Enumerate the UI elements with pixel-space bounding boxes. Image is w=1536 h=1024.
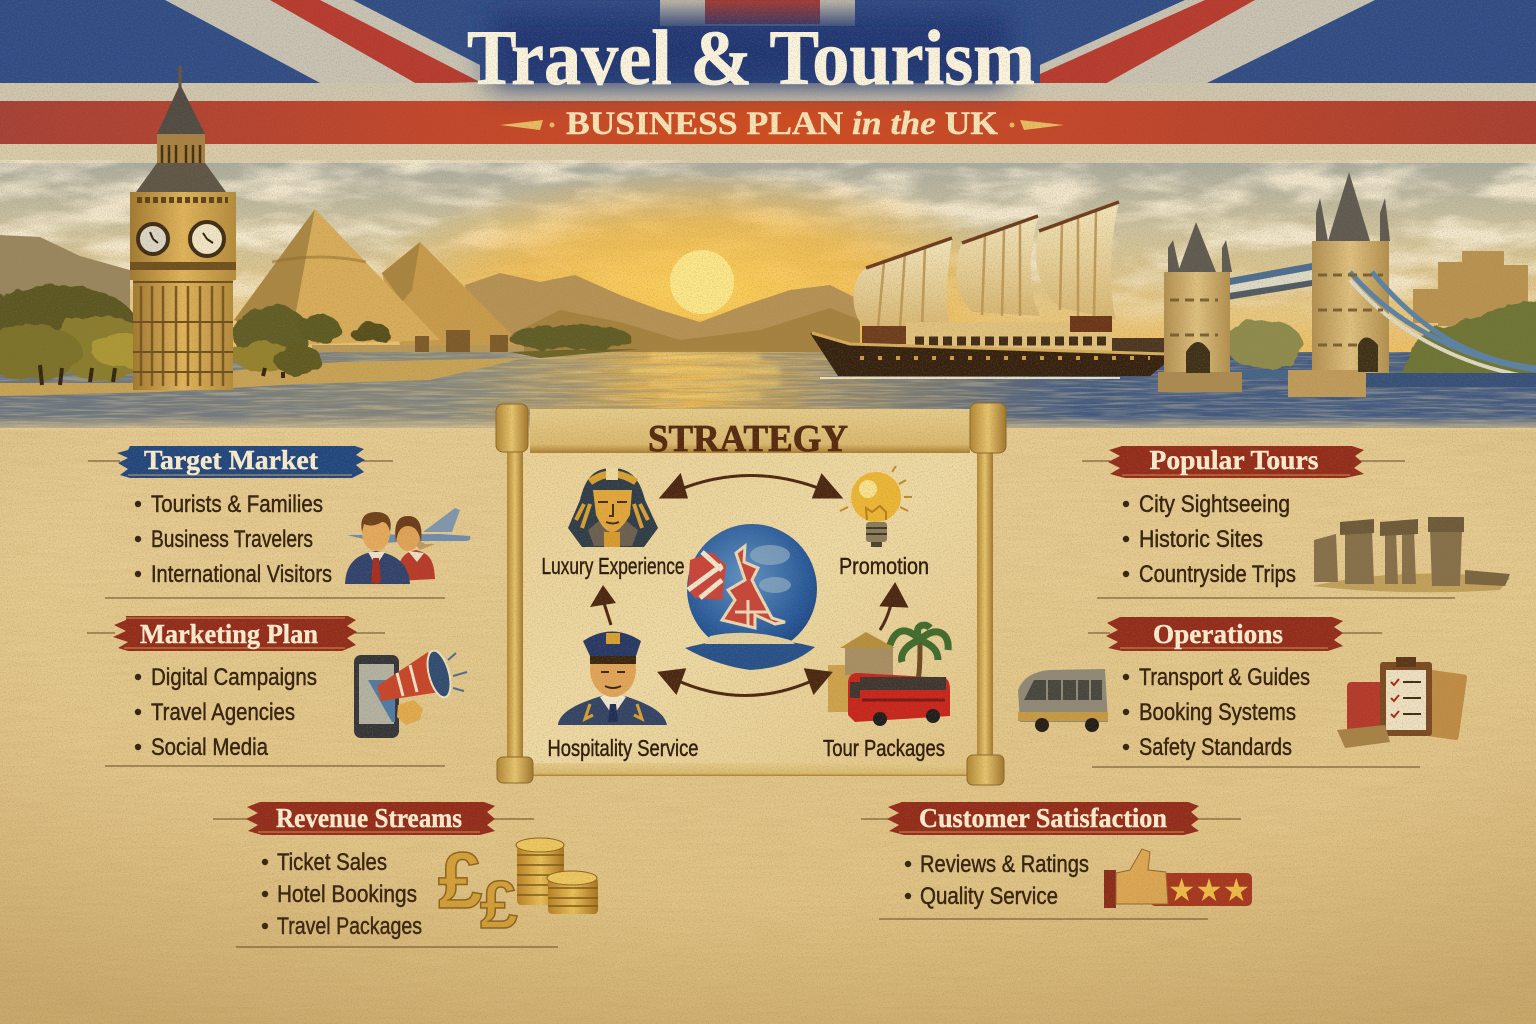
distant trees	[1227, 320, 1303, 370]
panel: revenue streams	[213, 802, 598, 947]
panel: customer satisfaction	[861, 802, 1252, 919]
mountains centre	[465, 273, 860, 352]
strategy heading: STRATEGY	[648, 418, 848, 460]
wake	[820, 377, 1120, 379]
clouds	[0, 160, 1536, 330]
sun	[670, 250, 734, 314]
ribbon	[1106, 617, 1343, 651]
pale strip under band	[0, 144, 1536, 163]
list: Transport & Guides	[1139, 664, 1310, 691]
flag header	[0, 0, 1536, 144]
list: Digital Campaigns	[151, 664, 317, 691]
panel: popular tours	[1082, 445, 1510, 598]
ribbon	[117, 446, 365, 478]
lower deck left	[1205, 370, 1295, 378]
list: Travel Agencies	[151, 699, 295, 726]
label: tour packages: Tour Packages	[823, 735, 945, 761]
list: Countryside Trips	[1139, 561, 1296, 588]
list	[135, 491, 332, 588]
panel: operations: Operations	[1153, 619, 1283, 649]
sun glow	[362, 170, 1042, 410]
label: promotion: Promotion	[839, 553, 929, 579]
trees	[0, 286, 632, 380]
tower bases	[1158, 372, 1242, 392]
list: Ticket Sales	[277, 849, 387, 876]
ribbon	[113, 616, 357, 651]
icon: phone and megaphone	[354, 648, 467, 738]
icon: clipboard and luggage	[1337, 657, 1467, 748]
panel: target market	[88, 445, 470, 598]
ribbon	[246, 802, 495, 835]
egyptian temple wall	[312, 345, 524, 363]
icon: lightbulb	[840, 466, 912, 547]
panel: popular tours: Popular Tours	[1150, 445, 1318, 475]
list: Travel Packages	[277, 913, 422, 940]
vignette	[0, 430, 1536, 1024]
list: Reviews & Ratings	[920, 851, 1089, 878]
scroll side rollers	[507, 445, 993, 765]
towers	[1164, 272, 1230, 374]
Tower Bridge	[1158, 172, 1536, 397]
icon: stonehenge	[1312, 517, 1510, 592]
sails	[853, 238, 952, 330]
icon: thumbs up with stars: ★★★	[1168, 871, 1250, 909]
icon: travellers and plane	[345, 508, 470, 584]
hull	[810, 333, 1172, 376]
icon: pounds and coins	[438, 836, 598, 943]
list: Tourists & Families	[151, 491, 323, 518]
icon: coach	[1018, 669, 1108, 732]
mountains left	[0, 235, 130, 330]
superstructure	[906, 322, 1112, 352]
paper grain	[0, 432, 1536, 1024]
list: Social Media	[151, 734, 269, 761]
list	[135, 664, 317, 761]
panel: strategy scroll	[496, 403, 1006, 785]
shore left	[0, 358, 525, 396]
panel: marketing plan	[87, 616, 467, 766]
sky	[0, 144, 1536, 356]
castle trees	[1400, 300, 1536, 375]
list	[1123, 491, 1296, 588]
list: International Visitors	[151, 561, 332, 588]
ribbon	[887, 802, 1199, 835]
sailing ship	[810, 202, 1172, 378]
water reflection	[630, 355, 780, 398]
list: Historic Sites	[1139, 526, 1263, 553]
walkway	[1197, 263, 1312, 300]
landscape panorama	[0, 144, 1536, 434]
panel: target market: Target Market	[144, 445, 318, 475]
arrow: hospitality to luxury	[590, 585, 616, 625]
fade into parchment	[0, 416, 1536, 434]
castle	[1413, 251, 1528, 329]
suspension cables	[1350, 272, 1536, 370]
pyramids	[234, 209, 524, 363]
list	[905, 851, 1089, 910]
deck right	[1363, 373, 1536, 387]
yards	[866, 202, 1119, 268]
scroll top bar	[496, 403, 1006, 453]
icon: tour bus with palm	[828, 625, 950, 726]
icon: hospitality officer	[558, 632, 667, 725]
tree trunks	[40, 365, 283, 385]
panel: revenue streams: Revenue Streams	[276, 803, 462, 833]
label: hospitality service: Hospitality Service	[548, 735, 698, 761]
scroll bottom bar	[497, 755, 1004, 785]
label: luxury experience: Luxury Experience	[542, 553, 684, 579]
list	[1123, 664, 1310, 761]
title: Travel & Tourism	[467, 14, 1035, 101]
list: Quality Service	[920, 883, 1058, 910]
ribbon	[1108, 446, 1364, 478]
panel: operations	[1018, 617, 1467, 767]
icon: globe with flag	[685, 524, 817, 670]
list: Booking Systems	[1139, 699, 1296, 726]
list: Hotel Bookings	[277, 881, 417, 908]
Big Ben	[130, 66, 236, 390]
list: City Sightseeing	[1139, 491, 1290, 518]
arrow: service to packages	[660, 670, 830, 696]
subtitle: BUSINESS PLAN in the UK	[566, 106, 998, 142]
water	[0, 352, 1536, 428]
arrow: luxury to promotion	[662, 476, 840, 497]
icon: thumbs up with stars	[1104, 849, 1252, 909]
distant shore	[510, 349, 640, 358]
icon: pounds and coins: £	[438, 836, 482, 925]
title background haze	[490, 14, 1010, 86]
arrow: packages to promotion	[880, 585, 906, 630]
panel: customer satisfaction: Customer Satisfaction	[919, 803, 1167, 833]
icon: pounds and coins: £	[480, 867, 518, 943]
panel: marketing plan: Marketing Plan	[140, 619, 318, 649]
list: Safety Standards	[1139, 734, 1292, 761]
icon: pharaoh	[568, 468, 658, 547]
list: Business Travelers	[151, 526, 313, 553]
list	[262, 849, 422, 940]
